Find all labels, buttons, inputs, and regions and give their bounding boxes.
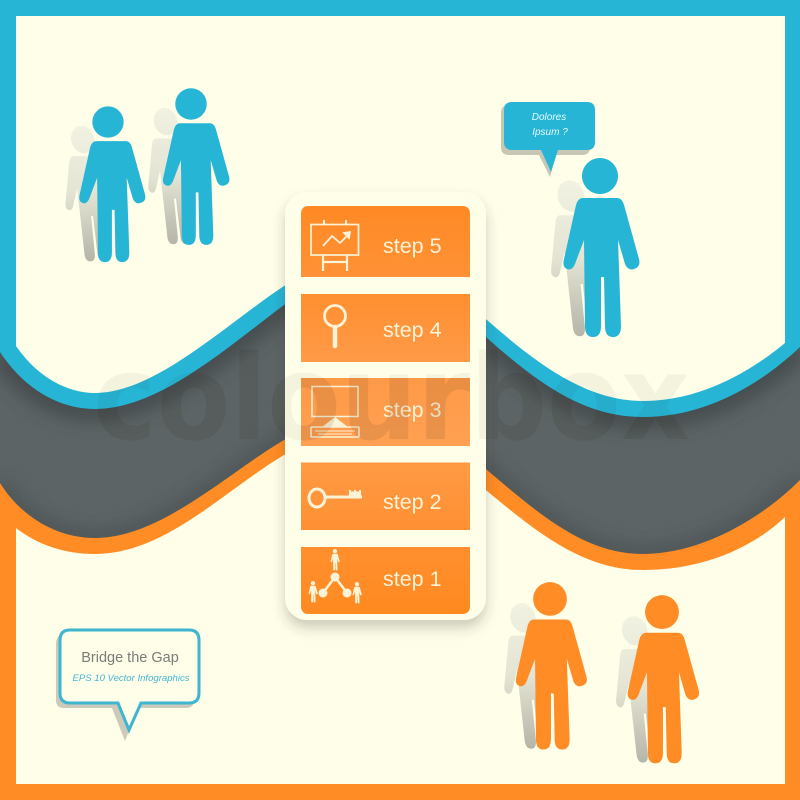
icon: people network: [309, 549, 362, 603]
orange frame and wave: [0, 426, 800, 800]
step 2 row: [301, 462, 470, 530]
blue frame and wave: [0, 0, 800, 417]
step 1 row: [301, 547, 470, 614]
icon: key: [309, 489, 362, 507]
step 5 row: step 5: [383, 234, 442, 258]
speech bubble: Dolores Ipsum: Dolores: [532, 112, 566, 123]
speech bubble: Bridge the Gap: Bridge the Gap: [81, 650, 179, 666]
panel: steps card: [285, 192, 486, 620]
step 3 row: [301, 378, 470, 446]
dark wave band: [0, 250, 800, 590]
speech bubble: Dolores Ipsum: [501, 102, 595, 177]
icon: magnifier: [324, 306, 346, 346]
speech bubble: Bridge the Gap: [56, 630, 199, 741]
icon: computer: [311, 386, 359, 437]
watermark: colourbox: [93, 329, 690, 467]
step 3 row: step 3: [383, 398, 442, 422]
speech bubble: Dolores Ipsum: Ipsum ?: [532, 127, 568, 138]
person: top blue second: [140, 88, 229, 245]
person: right blue: [542, 158, 639, 337]
speech bubble: Bridge the Gap: EPS 10 Vector Infographics: [72, 673, 190, 684]
step 5 row: [301, 206, 470, 277]
step 4 row: [301, 294, 470, 362]
person: orange right: [607, 595, 699, 763]
person: top left blue: [58, 106, 145, 262]
icon: easel chart: [311, 220, 358, 271]
watermark: [98, 350, 688, 440]
step 1 row: step 1: [383, 567, 442, 591]
step 2 row: step 2: [383, 490, 442, 514]
person: orange left: [496, 582, 587, 749]
step 4 row: step 4: [383, 318, 442, 342]
